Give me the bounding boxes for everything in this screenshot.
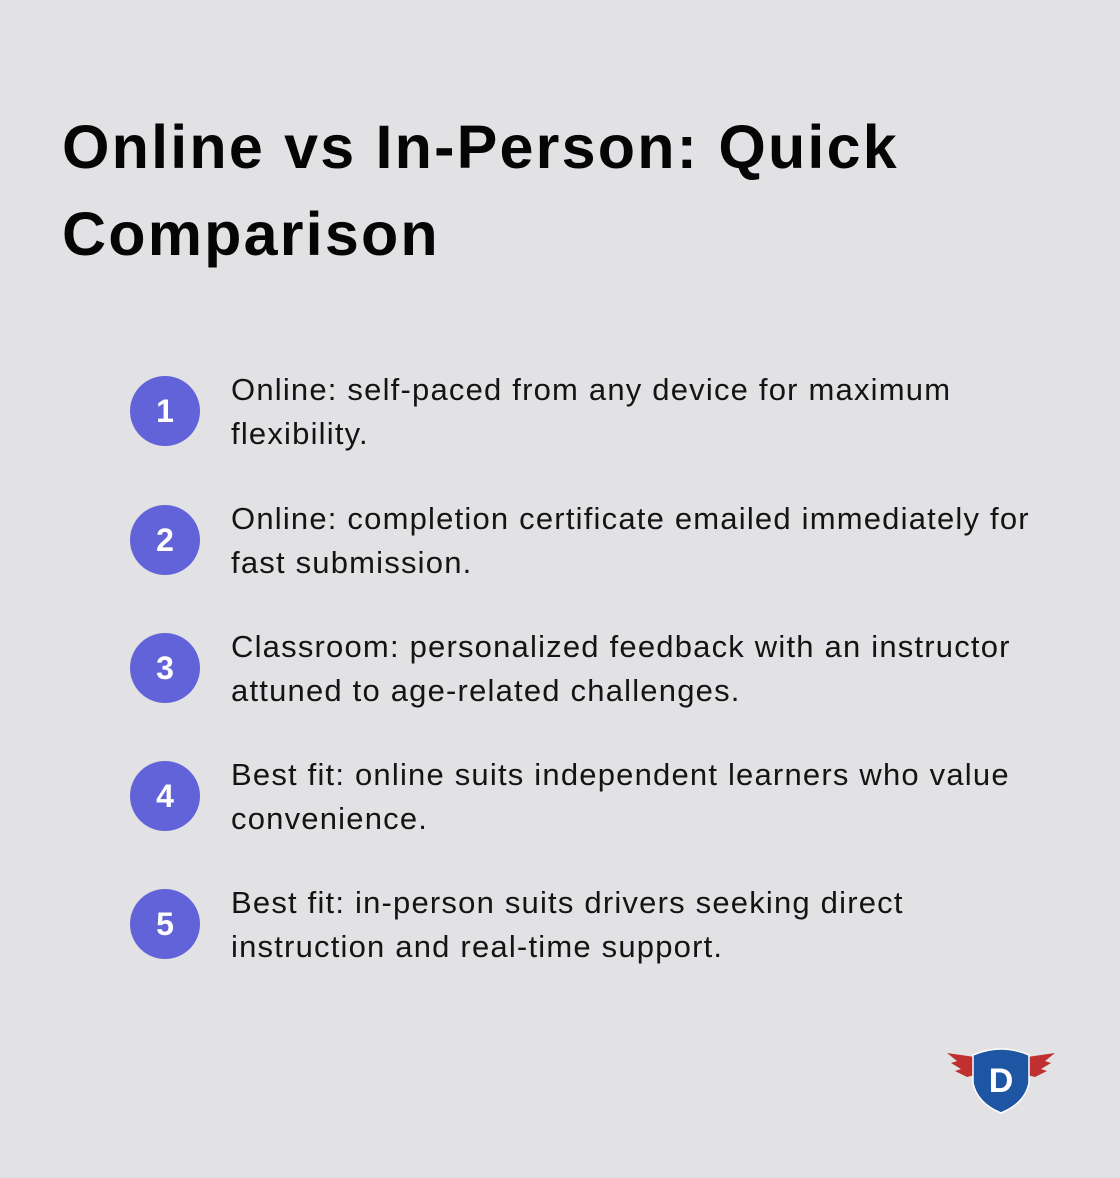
item 5 (130, 885, 904, 964)
title: Online vs In-Person: Quick (62, 113, 899, 181)
item 4: Best fit: online suits independent learners who value (231, 757, 1010, 792)
title (62, 113, 899, 268)
item 3: attuned to age-related challenges. (231, 673, 741, 708)
item 2: fast submission. (231, 545, 472, 580)
item 5: instruction and real-time support. (231, 929, 723, 964)
item 2 (130, 501, 1030, 580)
item 1: flexibility. (231, 416, 369, 451)
item 1: 1 (156, 393, 174, 429)
item 2: 2 (156, 522, 174, 558)
item 1: Online: self-paced from any device for maximum (231, 372, 951, 407)
item 3: Classroom: personalized feedback with an instructor (231, 629, 1011, 664)
icon: logo shield: D (989, 1062, 1013, 1100)
item 5: Best fit: in-person suits drivers seeking direct (231, 885, 904, 920)
icon: logo shield (947, 1048, 1055, 1114)
item 4: 4 (156, 778, 174, 814)
item 5: 5 (156, 906, 174, 942)
item 1 (130, 372, 951, 451)
item 4: convenience. (231, 801, 428, 836)
item 2: Online: completion certificate emailed immediately for (231, 501, 1030, 536)
item 3 (130, 629, 1011, 708)
item 3: 3 (156, 650, 174, 686)
item 4 (130, 757, 1010, 836)
title: Comparison (62, 200, 440, 268)
